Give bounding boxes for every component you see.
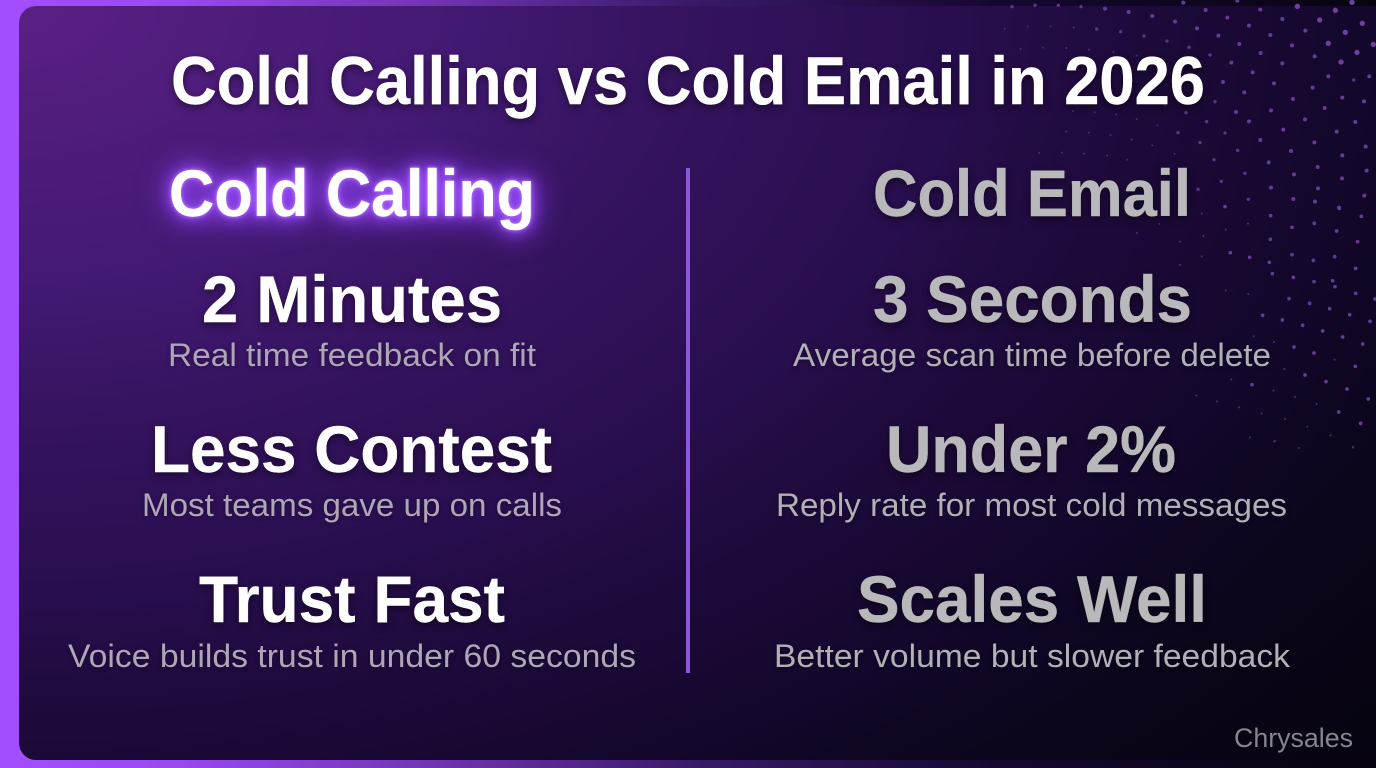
divider line <box>686 168 690 673</box>
stat: 2 minutes <box>168 262 536 373</box>
dot pattern: top right <box>1005 1 1375 448</box>
stat: less contest: Most teams gave up on calls <box>142 487 562 523</box>
stat: under 2%: Under 2% <box>886 412 1176 486</box>
stat: trust fast: Trust Fast <box>199 562 505 636</box>
stat: under 2% <box>776 412 1287 523</box>
brand label: Chrysales <box>1234 723 1353 753</box>
column: cold calling <box>68 156 636 674</box>
stat: under 2%: Reply rate for most cold messages <box>776 487 1287 523</box>
stat: 3 seconds: 3 Seconds <box>873 262 1192 336</box>
stat: scales well: Better volume but slower feedback <box>774 638 1291 674</box>
stat: 2 minutes: Real time feedback on fit <box>168 337 536 373</box>
stat: scales well: Scales Well <box>857 562 1207 636</box>
title: Cold Calling vs Cold Email in 2026 <box>171 43 1205 119</box>
heading: cold calling: Cold Calling <box>169 156 535 230</box>
stat: 2 minutes: 2 Minutes <box>202 262 502 336</box>
stat: trust fast: Voice builds trust in under 60 seconds <box>68 638 636 674</box>
heading: cold email: Cold Email <box>873 156 1191 230</box>
stat: 3 seconds <box>793 262 1271 373</box>
stat: scales well <box>774 562 1291 674</box>
stat: less contest <box>142 412 562 523</box>
stat: 3 seconds: Average scan time before delete <box>793 337 1271 373</box>
column: cold email <box>774 156 1291 674</box>
stat: less contest: Less Contest <box>151 412 552 486</box>
stat: trust fast <box>68 562 636 674</box>
